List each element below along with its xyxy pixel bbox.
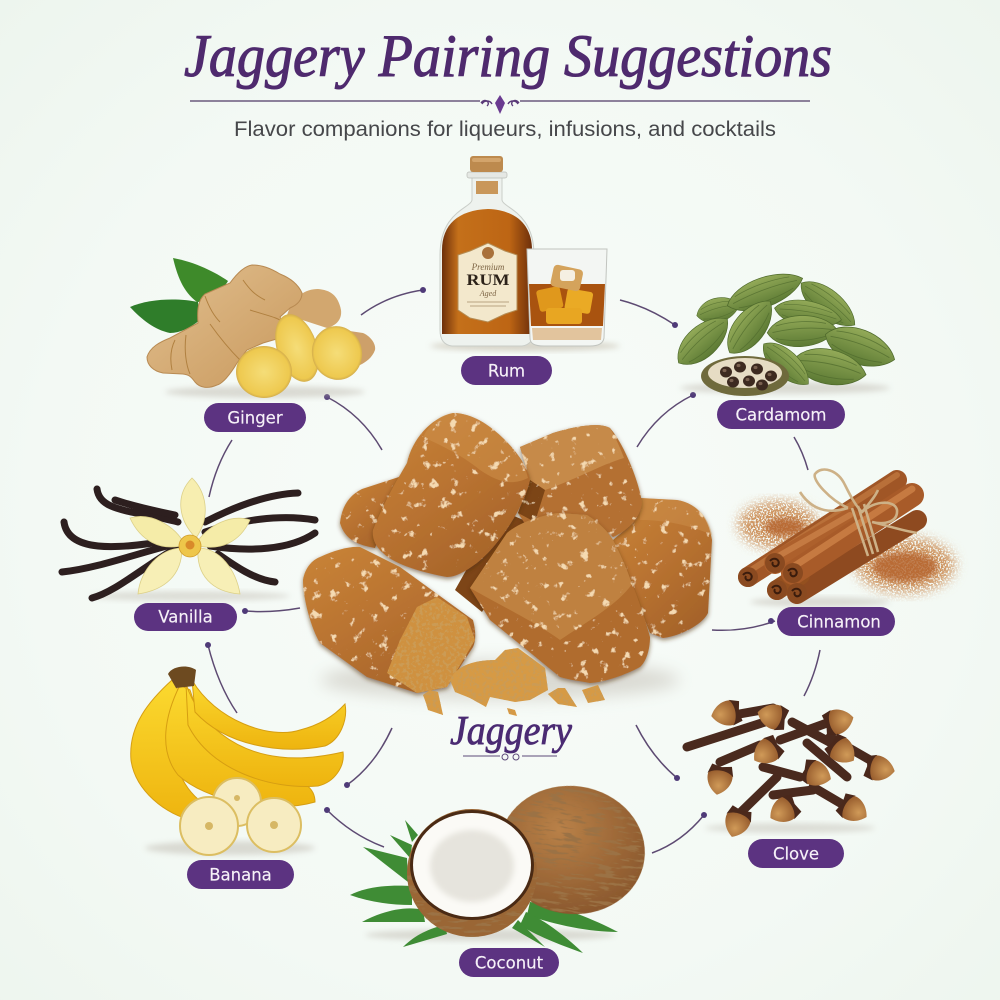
pill: Cardamom: Cardamom: [736, 406, 826, 424]
center: jaggery pile: [303, 413, 712, 716]
pill: Rum: [461, 356, 552, 385]
jaggery block: back left: [340, 476, 402, 548]
item: coconut: [350, 776, 653, 953]
pill: Coconut: [459, 948, 559, 977]
cinnamon powder: [738, 501, 955, 593]
jaggery block: top center: [373, 413, 530, 577]
pill: Cinnamon: [777, 607, 895, 636]
pill: Vanilla: [134, 603, 237, 631]
jaggery crumbs: [423, 648, 605, 716]
title divider with ornament: [190, 95, 810, 114]
item: cinnamon: [738, 470, 955, 607]
pill: Clove: [748, 839, 844, 868]
rum bottle: RUM: [466, 272, 510, 289]
jaggery block: lower left: [303, 547, 475, 693]
banana slices: [180, 778, 301, 855]
rum bottle: Premium: [471, 262, 505, 272]
cinnamon stick ends: [738, 553, 807, 603]
pill: Vanilla: Vanilla: [158, 608, 213, 626]
jaggery block: lower center: [470, 513, 650, 683]
title: Jaggery Pairing Suggestions: [184, 23, 832, 89]
rum bottle: [440, 156, 534, 346]
pill: Coconut: Coconut: [475, 954, 544, 972]
vanilla flower: [130, 478, 250, 594]
pill: Ginger: Ginger: [227, 408, 283, 428]
connectors between items: [205, 287, 820, 853]
ginger slices: [236, 309, 368, 398]
whisky glass: [527, 249, 607, 346]
coconut fronds: [350, 820, 618, 953]
pill: Clove: Clove: [773, 844, 819, 864]
pill: Rum: Rum: [488, 362, 525, 380]
twine bow: [800, 470, 917, 556]
jaggery block: right: [613, 498, 712, 638]
rum bottle: Aged: [479, 289, 497, 298]
cinnamon sticks: [748, 475, 917, 594]
ginger root: [147, 265, 375, 387]
clove heads: [704, 698, 897, 841]
item: ginger: [130, 258, 375, 398]
item: cardamom: [668, 265, 900, 396]
vanilla pods: [62, 489, 315, 598]
banana bunch: [131, 667, 346, 821]
item: clove: [687, 698, 897, 841]
cardamom pods: [668, 265, 900, 394]
item: banana: [131, 667, 346, 855]
pill: Banana: Banana: [209, 866, 272, 884]
pill: Ginger: [204, 403, 306, 432]
jaggery block: top right: [518, 425, 642, 537]
subtitle: Flavor companions for liqueurs, infusions, and cocktails: [234, 117, 776, 141]
pill: Cardamom: [717, 400, 845, 429]
halved coconut: [407, 809, 537, 937]
ginger leaves: [130, 258, 228, 333]
pill: Cinnamon: Cinnamon: [797, 612, 881, 632]
clove stems: [687, 708, 870, 813]
cardamom seeds bowl: [701, 356, 789, 396]
whole coconut: [491, 776, 653, 924]
item: vanilla: [62, 478, 315, 601]
pill: Banana: [187, 860, 294, 889]
center label: Jaggery: [450, 707, 573, 753]
item: rum: [430, 156, 620, 351]
jaggery crumbly cut end: [387, 597, 475, 693]
